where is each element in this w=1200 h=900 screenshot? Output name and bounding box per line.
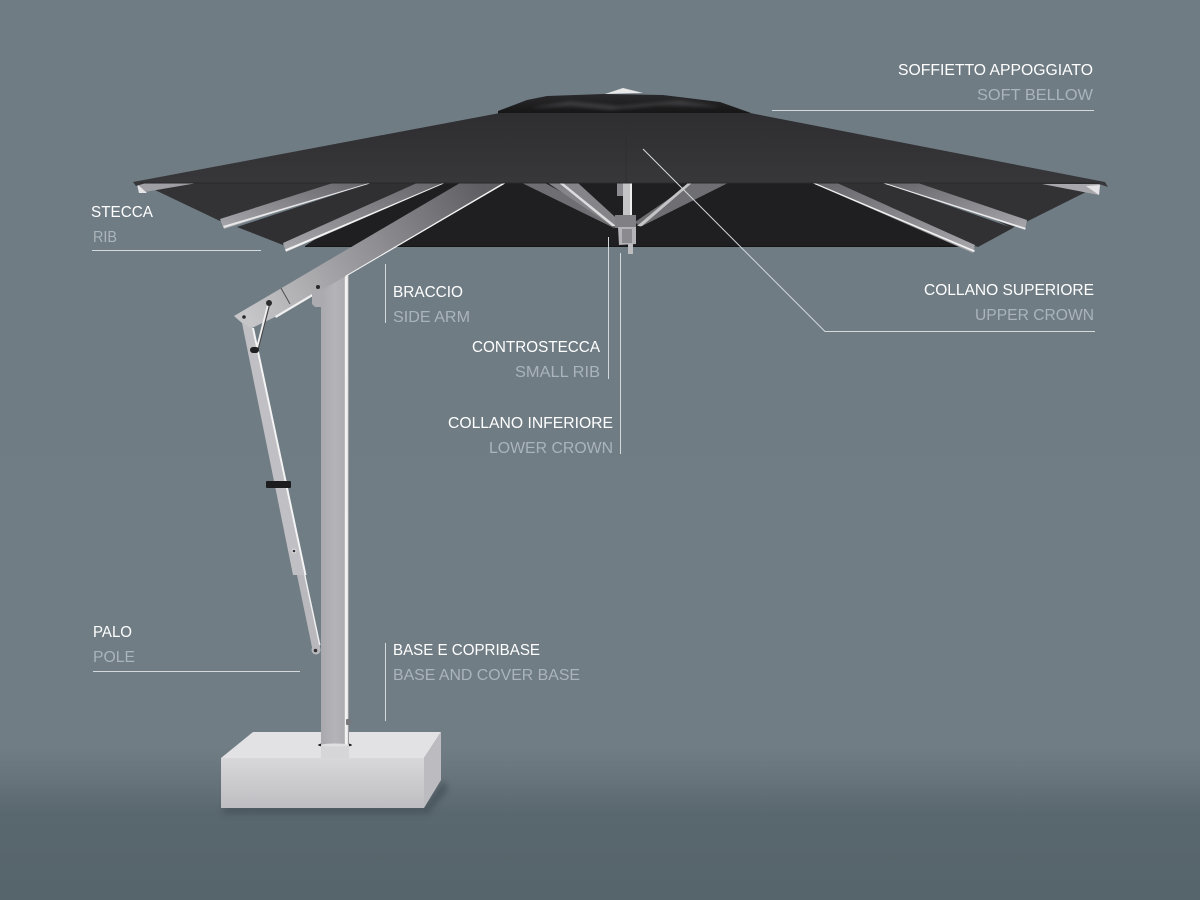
label: side arm: SIDE ARM: [393, 309, 470, 326]
label: small rib: [472, 237, 608, 381]
label: upper crown: COLLANO SUPERIORE: [924, 282, 1094, 299]
label: pole: PALO: [93, 624, 132, 641]
label: rib: RIB: [93, 229, 117, 246]
rib: right ribs: [812, 183, 1100, 253]
label: base and cover base: [386, 642, 580, 721]
rib: left ribs: [137, 183, 445, 252]
label: lower crown: LOWER CROWN: [489, 440, 613, 457]
label: soft bellow: [772, 62, 1094, 110]
canopy underside: [305, 183, 975, 246]
label: base and cover base: BASE E COPRIBASE: [393, 642, 540, 659]
label: base and cover base: BASE AND COVER BASE: [393, 667, 580, 684]
soft bellow: [498, 88, 751, 116]
label: small rib: CONTROSTECCA: [472, 339, 600, 356]
canopy side panels: [155, 183, 1100, 247]
base and cover base: [221, 732, 448, 814]
label: soft bellow: SOFFIETTO APPOGGIATO: [898, 62, 1093, 79]
side arm: [234, 183, 506, 353]
label: side arm: BRACCIO: [393, 284, 463, 301]
lower crown and small ribs: [522, 183, 728, 254]
label: soft bellow: SOFT BELLOW: [977, 87, 1094, 104]
label: rib: STECCA: [91, 204, 153, 221]
label: small rib: SMALL RIB: [515, 364, 600, 381]
side strut: [242, 323, 320, 654]
label: rib: [91, 204, 261, 250]
label: side arm: [386, 264, 470, 326]
label: pole: POLE: [93, 649, 135, 666]
pole: [321, 275, 351, 746]
canopy top: [133, 113, 1108, 187]
label: upper crown: [643, 149, 1095, 332]
label: lower crown: COLLANO INFERIORE: [448, 415, 613, 432]
strut clamp: [266, 481, 291, 488]
label: lower crown: [448, 253, 620, 457]
label: pole: [93, 624, 300, 672]
label: upper crown: UPPER CROWN: [975, 307, 1094, 324]
